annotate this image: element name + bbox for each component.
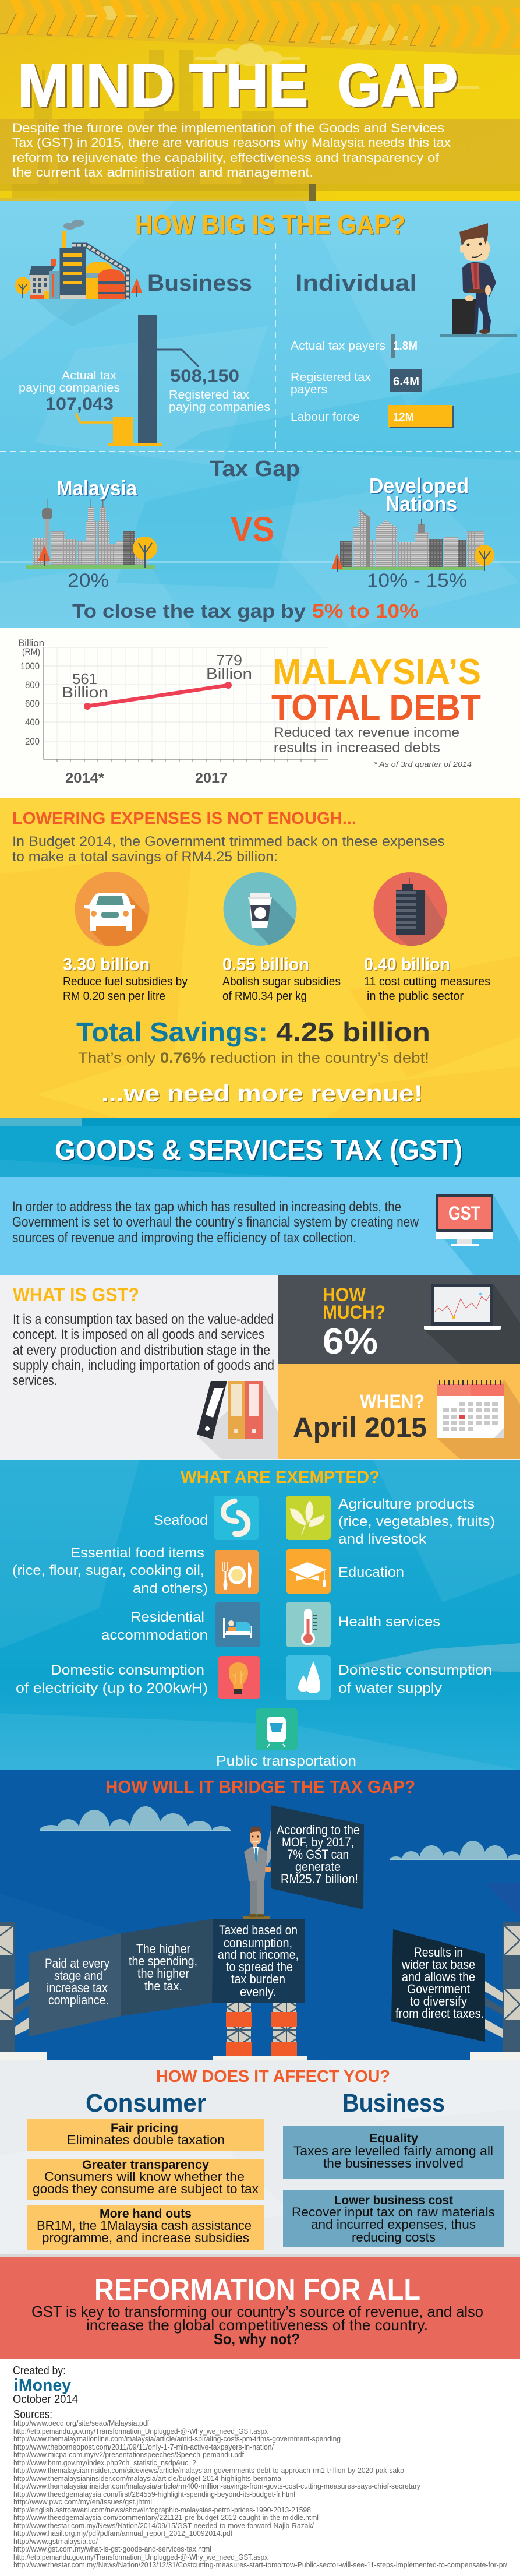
line chart: 200 bbox=[25, 736, 40, 747]
icon: factory bbox=[15, 220, 142, 326]
item: essential food: (rice, flour, sugar, cooking oil, bbox=[12, 1563, 204, 1578]
intro band bbox=[0, 119, 520, 184]
value: actual: 107,043 bbox=[45, 394, 114, 414]
created by: Created by: bbox=[13, 2364, 66, 2377]
sources heading: Sources: bbox=[13, 2408, 52, 2421]
text bbox=[31, 2303, 483, 2348]
card: lower business cost: Recover input tax on raw materials bbox=[292, 2205, 495, 2219]
line chart: Billion bbox=[206, 665, 252, 682]
panel text: results in wider tax base: to diversify bbox=[410, 1994, 467, 2008]
background facets bbox=[0, 201, 520, 628]
icon: binders bbox=[197, 1381, 263, 1439]
panel text: results in wider tax base bbox=[391, 1929, 485, 2042]
bridge legs bbox=[226, 2003, 297, 2056]
bar chart: individual: 6.4M bbox=[393, 375, 419, 388]
heading: HOW WILL IT BRIDGE THE TAX GAP? bbox=[105, 1777, 415, 1797]
heading: GOODS & SERVICES TAX (GST) bbox=[55, 1135, 462, 1166]
bar chart: individual: Actual tax payers bbox=[291, 340, 385, 353]
heading: WHAT IS GST? bbox=[13, 1284, 139, 1305]
icon: building bbox=[374, 872, 447, 946]
sources list: http://www.bnm.gov.my/index.php?ch=statistic_nsdp&uc=2 bbox=[13, 2458, 196, 2467]
item: health bbox=[286, 1602, 440, 1647]
logo: imoney: iMoney bbox=[14, 2376, 71, 2395]
bar chart: business bbox=[19, 315, 270, 446]
background facets bbox=[0, 851, 520, 1118]
icon: calendar bbox=[437, 1380, 504, 1438]
panel text: higher the spending: The higher bbox=[136, 1941, 190, 1956]
panel text: paid at every stage: compliance. bbox=[48, 1993, 109, 2007]
bar chart: individual: 1.8M bbox=[393, 340, 418, 353]
item: seafood bbox=[154, 1496, 259, 1540]
label: registered bbox=[169, 389, 270, 414]
title: THE bbox=[189, 52, 308, 119]
text bbox=[12, 1199, 419, 1246]
bar chart: individual: Labour force bbox=[291, 411, 360, 424]
title: GAP bbox=[338, 52, 458, 119]
total savings: Total Savings: bbox=[76, 1017, 268, 1047]
item: essential food: Essential food items bbox=[70, 1545, 204, 1561]
item: seafood: Seafood bbox=[154, 1513, 208, 1528]
card: equality: Equality bbox=[369, 2132, 418, 2145]
sources list: http://www.gstmalaysia.co/ bbox=[13, 2537, 98, 2546]
subheading: business: Business bbox=[342, 2089, 445, 2117]
binders shadow bbox=[198, 1381, 278, 1459]
cloud left bbox=[40, 1806, 231, 1855]
text: So, why not? bbox=[214, 2330, 300, 2348]
item: public transportation: Public transportation bbox=[216, 1753, 356, 1769]
card: equality bbox=[283, 2126, 504, 2179]
panel text: higher the spending bbox=[121, 1919, 213, 2016]
panel text: results in wider tax base: Results in bbox=[414, 1945, 463, 1960]
panel text: higher the spending: the tax. bbox=[144, 1979, 182, 1993]
title bbox=[17, 52, 458, 119]
panel: total debt bbox=[0, 628, 520, 798]
card: equality: Taxes are levelled fairly among all bbox=[293, 2144, 493, 2158]
panel text: taxed based on consumption: Taxed based on bbox=[219, 1923, 298, 1937]
line chart: 2014* bbox=[65, 770, 105, 786]
subheading: consumer: Consumer bbox=[86, 2089, 206, 2117]
heading: malaysia's total debt: MALAYSIA’S bbox=[273, 652, 481, 692]
vertical divider bbox=[275, 243, 276, 449]
label: developed nations bbox=[369, 474, 469, 516]
saving 2: of RM0.34 per kg bbox=[222, 990, 307, 1003]
bases bbox=[0, 2052, 520, 2060]
card: lower business cost: reducing costs bbox=[352, 2230, 436, 2244]
skyline: developed nations bbox=[331, 509, 494, 572]
sources list: http://english.astroawani.com/news/show/infographic-malaysias-petrol-prices-1990-2013-21598 bbox=[13, 2505, 311, 2514]
billboard: rm25.7 billion bbox=[271, 1805, 364, 1909]
panel text: results in wider tax base: from direct taxes. bbox=[395, 2006, 484, 2021]
heading: HOW DOES IT AFFECT YOU? bbox=[156, 2067, 390, 2086]
skyline: malaysia bbox=[26, 499, 157, 569]
saving 3: in the public sector bbox=[367, 990, 464, 1003]
ground strip bbox=[0, 198, 309, 201]
heading: malaysia's total debt: TOTAL DEBT bbox=[271, 688, 481, 728]
billboard: rm25.7 billion: MOF, by 2017, bbox=[282, 1835, 354, 1849]
text: In order to address the tax gap which has resulted in increasing debts, the bbox=[12, 1199, 401, 1215]
item: agriculture: Agriculture products bbox=[338, 1496, 475, 1512]
sources list: http://www.theedgemalaysia.com/commentary/221121-pre-budget-2012-caught-in-the-middle.html bbox=[13, 2513, 319, 2522]
item: electricity bbox=[16, 1656, 260, 1699]
text: at every production and distribution stage in the bbox=[13, 1342, 270, 1358]
panel: how does it affect you bbox=[0, 2060, 520, 2257]
panel text: paid at every stage bbox=[29, 1933, 121, 2036]
item: agriculture bbox=[286, 1496, 495, 1547]
panel text: taxed based on consumption: tax burden bbox=[231, 1972, 285, 1986]
sources list bbox=[13, 2419, 507, 2569]
calendar shadow bbox=[437, 1380, 520, 1459]
sources list: http://www.gst.com.my/what-is-gst-goods-and-services-tax.html bbox=[13, 2545, 211, 2553]
sources list: http://www.pwc.com/my/en/issues/gst.jhtml bbox=[13, 2497, 152, 2506]
title: MIND bbox=[17, 52, 175, 119]
icon: monitor bbox=[436, 1194, 493, 1246]
panel text: taxed based on consumption: consumption, bbox=[224, 1936, 292, 1950]
footnote: * As of 3rd quarter of 2014 bbox=[374, 760, 472, 769]
heading: WHEN? bbox=[360, 1391, 425, 1412]
card: lower business cost: and incurred expenses, thus bbox=[311, 2217, 476, 2232]
value: April 2015 bbox=[293, 1412, 427, 1443]
panel: lowering expenses bbox=[0, 798, 520, 1118]
sources list: http://www.oecd.org/site/seao/Malaysia.pdf bbox=[13, 2419, 149, 2427]
line chart: (RM) bbox=[22, 646, 40, 657]
text: services. bbox=[13, 1373, 57, 1389]
cloud edges bbox=[40, 1831, 520, 1860]
vs: VS bbox=[231, 510, 274, 549]
panel: gst title band bbox=[0, 1118, 520, 1177]
intro text: Despite the furore over the implementation of the Goods and Services bbox=[12, 121, 444, 135]
panel text: taxed based on consumption bbox=[212, 1919, 305, 2003]
line chart: 800 bbox=[25, 679, 40, 690]
sources list: http://www.themalaymailonline.com/malaysia/article/amid-spiraling-costs-pm-trims-government-spending bbox=[13, 2434, 341, 2443]
bar chart: individual bbox=[291, 334, 454, 428]
line chart: 561 bbox=[72, 670, 97, 688]
item: water: of water supply bbox=[338, 1680, 442, 1696]
intro text bbox=[12, 834, 445, 865]
card: greater transparency: Greater transparency bbox=[82, 2158, 209, 2172]
reduction note: That’s only 0.76% reduction in the country’s debt! bbox=[78, 1050, 429, 1066]
item: water bbox=[286, 1655, 492, 1700]
panel: credits bbox=[0, 2359, 520, 2576]
label: 20 percent: 20% bbox=[68, 570, 109, 591]
icon: coffee cup bbox=[224, 872, 297, 946]
card: equality: the businesses involved bbox=[323, 2156, 464, 2170]
item: agriculture: and livestock bbox=[338, 1531, 427, 1547]
text: reduced tax revenue: Reduced tax revenue income bbox=[274, 725, 459, 741]
item: public transportation bbox=[216, 1708, 356, 1769]
label: 10 to 15 percent: 10% - 15% bbox=[367, 570, 467, 591]
heading: REFORMATION FOR ALL bbox=[94, 2273, 420, 2307]
tree trunk bbox=[309, 184, 316, 201]
card: greater transparency: goods they consume are subject to tax bbox=[33, 2182, 259, 2196]
saving 1: 3.30 billion bbox=[63, 955, 150, 974]
line chart bbox=[18, 637, 328, 786]
lower shade bbox=[0, 184, 520, 191]
bar chart: individual: 12M bbox=[393, 411, 414, 424]
card: more hand outs: BR1M, the 1Malaysia cash assistance bbox=[37, 2218, 252, 2233]
background facets bbox=[0, 2121, 291, 2254]
value: 6% bbox=[323, 1322, 378, 1362]
saving 3: 0.40 billion bbox=[364, 955, 450, 974]
item: residential bbox=[101, 1602, 260, 1647]
background facets bbox=[0, 1459, 520, 1770]
item: health: Health services bbox=[338, 1614, 440, 1630]
card: fair pricing bbox=[27, 2119, 264, 2151]
panel: how will it bridge bbox=[0, 1770, 520, 2060]
icon: laptop bbox=[424, 1284, 501, 1330]
saving 3: 11 cost cutting measures bbox=[364, 975, 490, 988]
laptop shadow bbox=[424, 1284, 520, 1364]
line chart: 2017 bbox=[195, 770, 228, 786]
saving 2 bbox=[222, 955, 341, 1003]
text: sources of revenue and improving the efficiency of tax collection. bbox=[12, 1230, 356, 1246]
bar chart: individual: Registered tax bbox=[291, 371, 371, 384]
text: It is a consumption tax based on the value-added bbox=[13, 1312, 274, 1327]
sources list: http://www.theborneopost.com/2011/09/11/only-1-7-mln-active-taxpayers-in-nation/ bbox=[13, 2443, 274, 2451]
horizontal divider bbox=[0, 451, 520, 452]
heading: HOW bbox=[323, 1284, 366, 1305]
card: greater transparency: Consumers will know whether the bbox=[44, 2169, 245, 2184]
item: essential food: and others) bbox=[133, 1581, 208, 1597]
label: developed nations: Nations bbox=[385, 492, 457, 516]
heading: LOWERING EXPENSES IS NOT ENOUGH... bbox=[12, 809, 356, 828]
panel: header bbox=[0, 0, 520, 201]
card: more hand outs: More hand outs bbox=[100, 2207, 192, 2221]
panel: what are exempted bbox=[0, 1459, 520, 1770]
item: residential: Residential bbox=[130, 1609, 204, 1625]
label: registered: Registered tax bbox=[169, 389, 249, 401]
right tower bbox=[485, 1922, 520, 2052]
text: concept. It is imposed on all goods and services bbox=[13, 1327, 264, 1342]
line chart: 1000 bbox=[20, 661, 40, 672]
text: GST is key to transforming our country’s source of revenue, and also bbox=[31, 2303, 483, 2320]
total savings: 4.25 billion bbox=[276, 1017, 430, 1047]
line chart: 400 bbox=[25, 717, 40, 728]
background skyline bbox=[12, 50, 309, 198]
statement: close the gap bbox=[72, 600, 419, 622]
need more revenue: ...we need more revenue! bbox=[101, 1081, 423, 1106]
label: individual: Individual bbox=[295, 270, 417, 296]
card: lower business cost: Lower business cost bbox=[334, 2194, 453, 2207]
statement: close the gap: To close the tax gap by bbox=[72, 600, 306, 622]
saving 3 bbox=[364, 955, 490, 1003]
card: more hand outs: programme, and increase subsidies bbox=[42, 2230, 249, 2245]
text: increase the global competitiveness of the country. bbox=[86, 2316, 428, 2334]
item: education: Education bbox=[338, 1564, 404, 1580]
billboard: rm25.7 billion: 7% GST can bbox=[287, 1847, 349, 1862]
text: Government is set to overhaul the country’s financial system by creating new bbox=[12, 1214, 419, 1230]
base platform bbox=[440, 334, 517, 337]
saving 1: Reduce fuel subsidies by bbox=[63, 975, 188, 988]
intro text: Tax (GST) in 2015, there are various reasons why Malaysia needs this tax bbox=[12, 135, 451, 150]
total savings bbox=[76, 1017, 430, 1047]
sources list: http://www.themalaysianinsider.com/malaysia/article/budget-2014-highlights-bernama bbox=[13, 2474, 282, 2483]
presenter man bbox=[243, 1826, 271, 1919]
item: electricity: of electricity (up to 200kwH) bbox=[16, 1680, 208, 1696]
saving 1: RM 0.20 sen per litre bbox=[63, 990, 165, 1003]
item: electricity: Domestic consumption bbox=[51, 1662, 204, 1678]
panel: how big is the gap bbox=[0, 201, 520, 628]
background clouds bbox=[82, 6, 479, 90]
icon: monitor: GST bbox=[448, 1203, 480, 1224]
panel: what is gst bbox=[0, 1275, 278, 1459]
line chart: Billion bbox=[62, 683, 108, 701]
mask below clouds bbox=[23, 1831, 520, 1883]
panel text: higher the spending: the higher bbox=[137, 1966, 189, 1981]
label: registered: paying companies bbox=[169, 401, 270, 414]
chevrons bbox=[6, 0, 520, 48]
item: essential food bbox=[12, 1545, 259, 1597]
billboard: rm25.7 billion: RM25.7 billion! bbox=[281, 1872, 358, 1886]
label: actual: paying companies bbox=[19, 382, 120, 394]
subheading: tax gap: Tax Gap bbox=[210, 457, 300, 481]
sources list: http://etp.pemandu.gov.my/Transformation_Unplugged-@-Why_we_need_GST.aspx bbox=[13, 2553, 268, 2561]
panel text: taxed based on consumption: and not income, bbox=[218, 1947, 299, 1962]
monitor shadow bbox=[436, 1194, 520, 1275]
panel text: results in wider tax base: Government bbox=[407, 1982, 470, 1996]
label: actual bbox=[19, 369, 120, 394]
card: lower business cost bbox=[283, 2190, 504, 2247]
chevron edges bbox=[0, 13, 440, 46]
sources list: http://www.thestar.com.my/News/Nation/2014/09/15/GST-needed-to-move-forward-Najib-Razak/ bbox=[13, 2521, 314, 2530]
icon: car bbox=[75, 872, 149, 946]
intro text bbox=[12, 121, 451, 179]
panel: when bbox=[278, 1364, 520, 1459]
card: greater transparency bbox=[27, 2158, 264, 2200]
label: actual: Actual tax bbox=[62, 369, 116, 382]
intro text: to make a total savings of RM4.25 billion: bbox=[12, 849, 278, 865]
heading bbox=[323, 1284, 385, 1323]
sources list: http://www.themalaysianinsider.com/malaysia/article/rm400-million-savings-from-govts-cost-cutting-measures-says-chief-secretary bbox=[13, 2482, 420, 2490]
item: education bbox=[286, 1549, 404, 1594]
panel text: paid at every stage: stage and bbox=[54, 1968, 102, 1983]
item: agriculture: (rice, vegetables, fruits) bbox=[338, 1514, 495, 1530]
sources list: http://www.theedgemalaysia.com/first/284559-highlight-spending-beyond-its-budget-fr.html bbox=[13, 2490, 295, 2499]
left tower bbox=[0, 1922, 29, 2052]
item: water: Domestic consumption bbox=[338, 1662, 492, 1678]
heading: WHAT ARE EXEMPTED? bbox=[181, 1468, 380, 1487]
card: fair pricing: Fair pricing bbox=[111, 2122, 178, 2135]
sources list: http://etp.pemandu.gov.my/Transformation_Unplugged-@-Why_we_need_GST.aspx bbox=[13, 2427, 268, 2436]
cloud right bbox=[390, 1841, 520, 1879]
panel text: results in wider tax base: wider tax base bbox=[401, 1957, 475, 1972]
sources list: http://www.hasil.org.my/pdf/pdfam/annual_report_2012_10092014.pdf bbox=[13, 2529, 232, 2538]
card: fair pricing: Eliminates double taxation bbox=[67, 2133, 225, 2147]
billboard: rm25.7 billion: generate bbox=[295, 1859, 341, 1874]
panel text: higher the spending: the spending, bbox=[129, 1954, 197, 1968]
saving 2: Abolish sugar subsidies bbox=[222, 975, 341, 988]
heading: HOW BIG IS THE GAP? bbox=[135, 209, 405, 239]
panel text: paid at every stage: Paid at every bbox=[45, 1956, 109, 1971]
statement: close the gap: 5% to 10% bbox=[312, 600, 419, 622]
panel: gst description bbox=[0, 1177, 520, 1275]
panel: reformation for all bbox=[0, 2257, 520, 2359]
label: malaysia: Malaysia bbox=[56, 476, 137, 500]
intro text: the current tax administration and management. bbox=[12, 165, 313, 179]
panel text: paid at every stage: increase tax bbox=[47, 1981, 108, 1995]
saving 2: 0.55 billion bbox=[222, 955, 309, 974]
text bbox=[13, 1312, 274, 1389]
text: reduced tax revenue bbox=[274, 725, 459, 756]
text: supply chain, including importation of goods and bbox=[13, 1358, 274, 1373]
panel: how much bbox=[278, 1275, 520, 1364]
bar chart: individual: payers bbox=[291, 383, 327, 396]
sources list: http://www.themalaysianinsider.com/sideviews/article/malaysian-governments-debt-to-approach-rm1-trillion-by-2020-pak-sako bbox=[13, 2466, 404, 2475]
panel text: taxed based on consumption: to spread the bbox=[226, 1960, 293, 1974]
intro text: In Budget 2014, the Government trimmed back on these expenses bbox=[12, 834, 445, 850]
icon: businessman bbox=[452, 223, 496, 334]
heading: malaysia's total debt bbox=[271, 652, 481, 728]
line chart: 779 bbox=[216, 651, 242, 669]
line chart: Billion bbox=[18, 637, 44, 649]
item: residential: accommodation bbox=[101, 1627, 208, 1643]
billboard: rm25.7 billion: According to the bbox=[277, 1823, 360, 1837]
heading: MUCH? bbox=[323, 1302, 385, 1323]
label: developed nations: Developed bbox=[369, 474, 469, 498]
saving 1 bbox=[63, 955, 188, 1003]
panel text: results in wider tax base: and allows the bbox=[402, 1969, 475, 1984]
value: registered: 508,150 bbox=[170, 367, 239, 386]
intro text: reform to rejuvenate the capability, effectiveness and transparency of bbox=[12, 150, 440, 165]
sources list: http://www.micpa.com.my/v2/presentationspeeches/Speech-pemandu.pdf bbox=[13, 2450, 244, 2459]
card: more hand outs bbox=[27, 2205, 264, 2250]
label: business: Business bbox=[147, 270, 252, 296]
panel text: taxed based on consumption: evenly. bbox=[240, 1985, 276, 1999]
text: reduced tax revenue: results in increased debts bbox=[274, 740, 440, 756]
date: October 2014 bbox=[13, 2393, 78, 2406]
line chart: 600 bbox=[25, 698, 40, 709]
light streak bbox=[0, 561, 520, 563]
